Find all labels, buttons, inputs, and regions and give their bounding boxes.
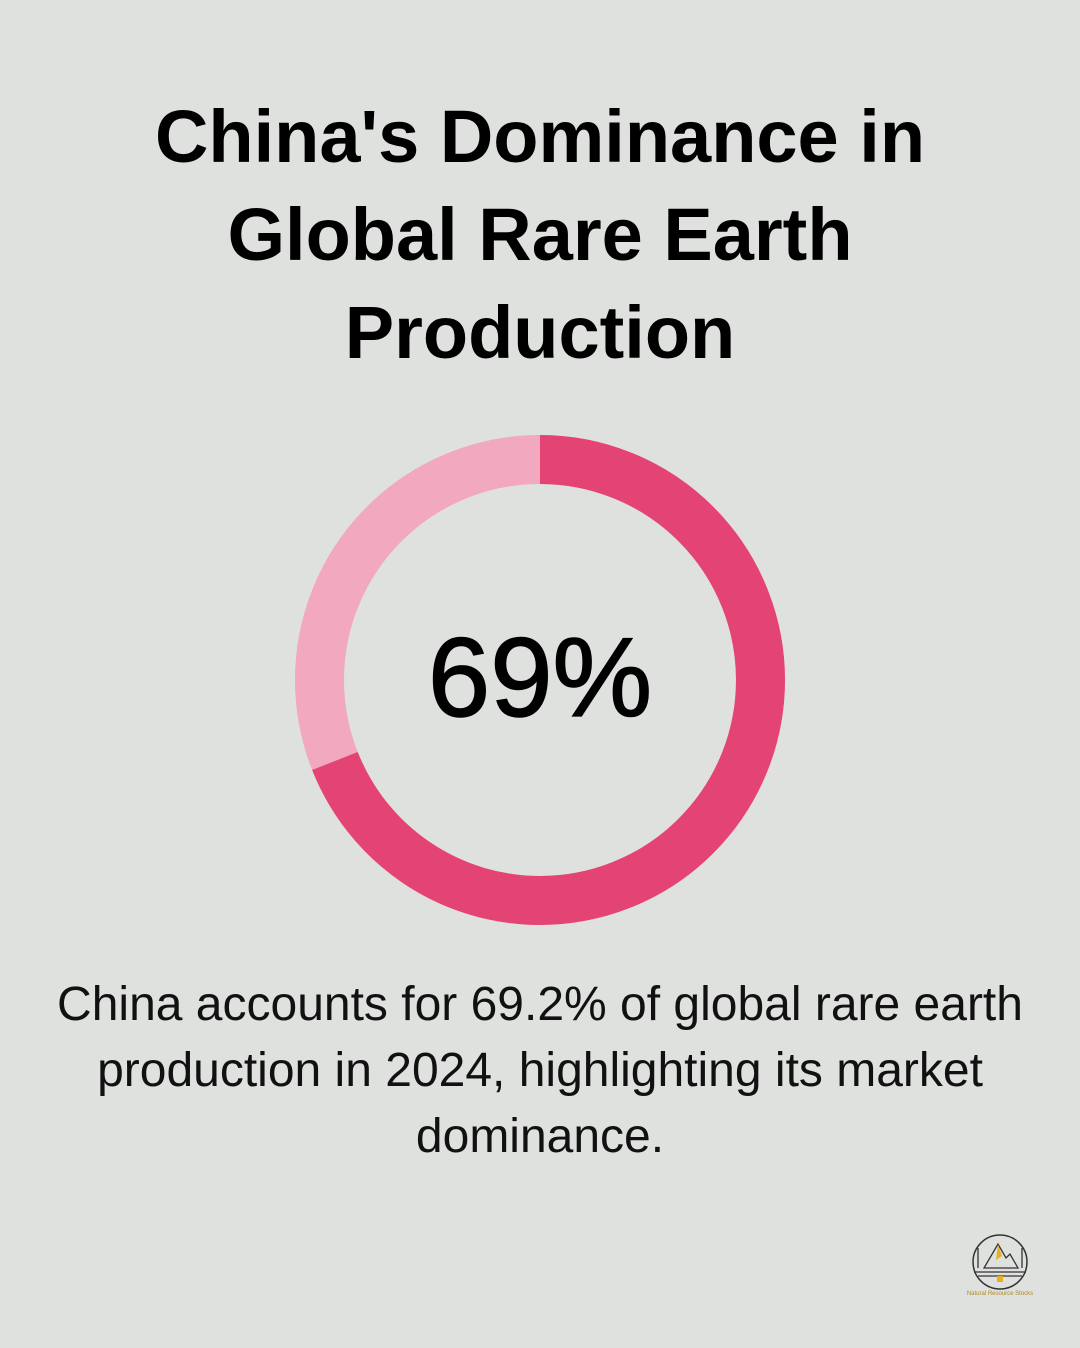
logo: Natural Resource Stocks	[967, 1291, 1033, 1297]
title: China's Dominance in	[155, 95, 925, 178]
donut background ring	[320, 460, 760, 900]
description text: China accounts for 69.2% of global rare earth production in 2024, highlighting its market dominance.	[57, 978, 1023, 1163]
donut 69% arc	[320, 460, 760, 900]
title	[155, 95, 925, 374]
center value: 69%	[428, 615, 652, 740]
title: Production	[345, 291, 735, 374]
title: Global Rare Earth	[227, 193, 853, 276]
logo	[967, 1234, 1033, 1297]
